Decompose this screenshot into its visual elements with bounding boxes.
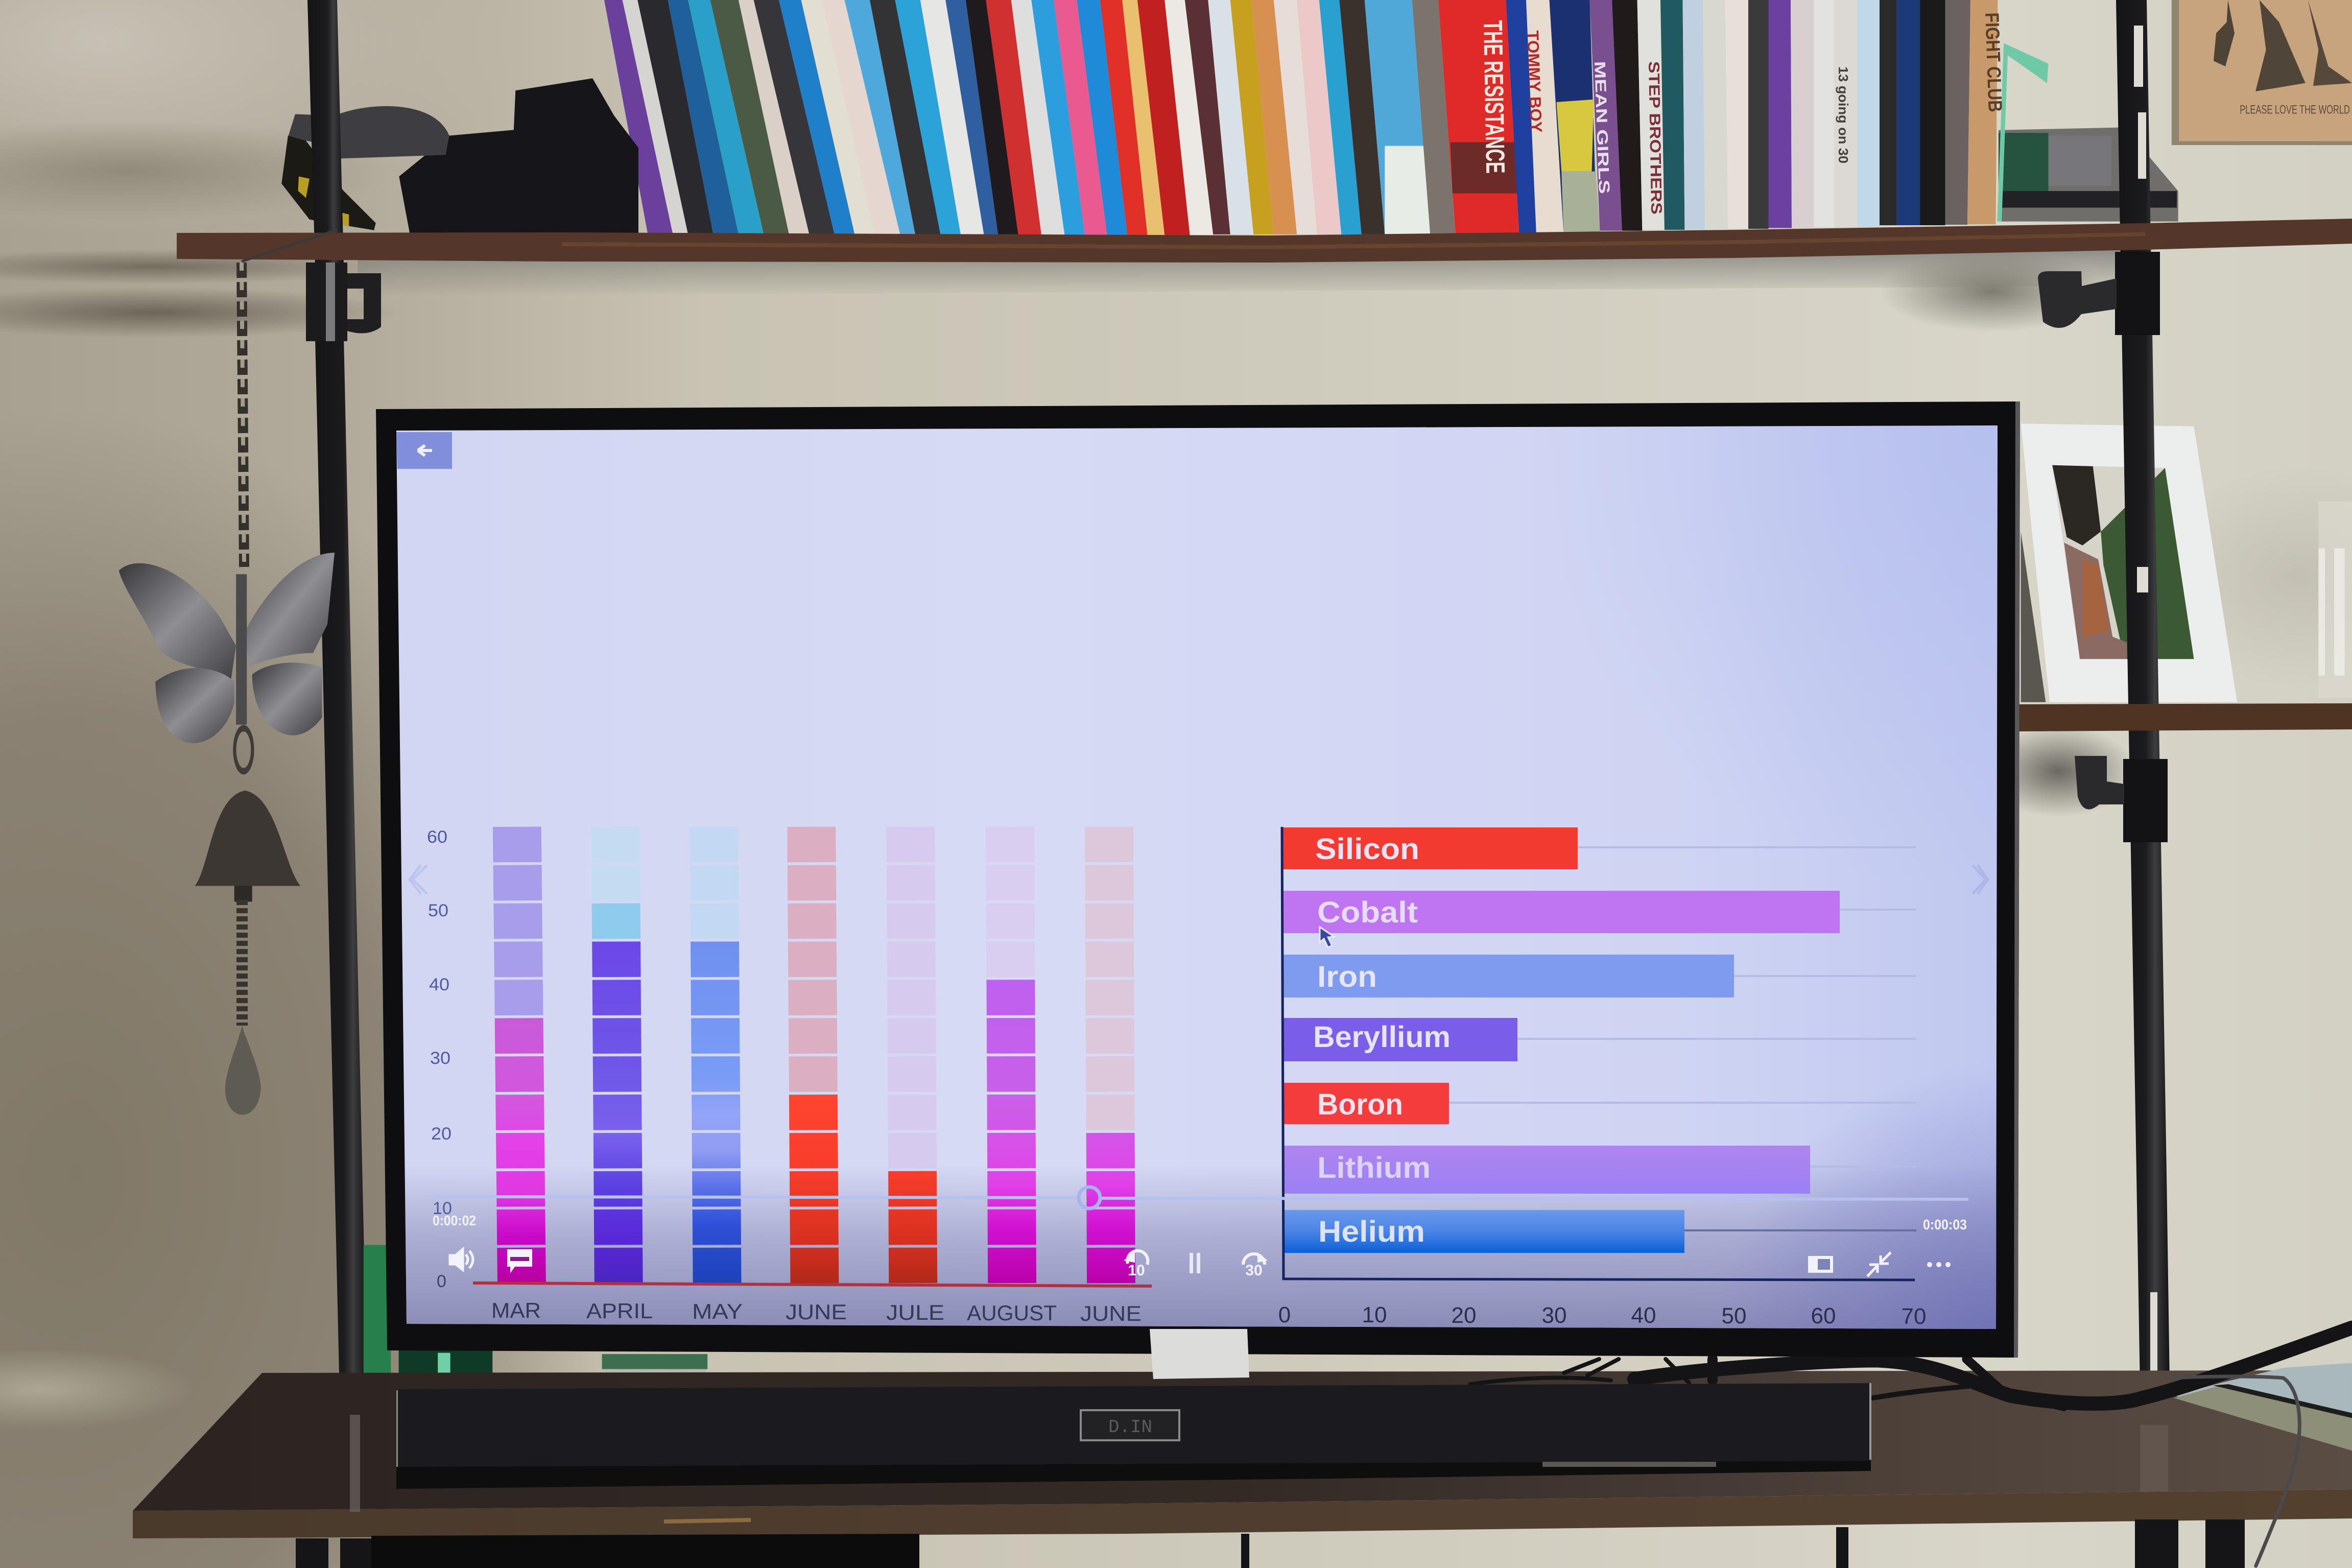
row of DVD spines on top shelf bbox=[604, 0, 1998, 235]
icon: captions bbox=[507, 1249, 532, 1273]
y axis labels: 50 bbox=[428, 901, 448, 920]
soundbar display bbox=[1081, 1410, 1179, 1440]
month labels: JULE bbox=[886, 1300, 944, 1324]
column: JUNE bbox=[812, 827, 815, 1285]
bar: Cobalt bbox=[1282, 891, 1840, 933]
x axis labels: 70 bbox=[1902, 1304, 1926, 1329]
left pipe lower section bbox=[315, 337, 368, 1418]
seek handle bbox=[1079, 1187, 1100, 1208]
next chevron bbox=[1973, 865, 1988, 894]
right pipe paint chips bbox=[2134, 26, 2157, 1415]
shelf on the right below picture frame bbox=[2019, 703, 2352, 731]
bar: Helium bbox=[1284, 1210, 1684, 1253]
column: MAY bbox=[714, 827, 717, 1284]
month labels: AUGUST bbox=[967, 1301, 1057, 1325]
legible spine titles on DVDs: FIGHT CLUB bbox=[1981, 12, 2006, 112]
y axis labels: 10 bbox=[433, 1199, 452, 1218]
bar: Boron: Boron bbox=[1317, 1088, 1403, 1121]
table legs bbox=[296, 1519, 2245, 1568]
back button bbox=[396, 432, 452, 469]
soundbar bbox=[396, 1383, 1871, 1489]
icon: picture in picture bbox=[1808, 1256, 1833, 1273]
previous chevron bbox=[410, 865, 427, 894]
month labels: MAR bbox=[491, 1298, 541, 1322]
x axis labels: 20 bbox=[1452, 1303, 1476, 1328]
bottle on the table bbox=[602, 1354, 707, 1388]
bar: Cobalt: Cobalt bbox=[1317, 896, 1418, 929]
legible spine titles on DVDs bbox=[1478, 12, 2006, 215]
jar on right shelf bbox=[2318, 501, 2352, 698]
month labels bbox=[491, 1298, 1142, 1325]
bar: Lithium: Lithium bbox=[1317, 1151, 1431, 1184]
right pipe fitting with bracket bbox=[2038, 252, 2160, 335]
icon: forward 30 bbox=[1243, 1252, 1268, 1279]
y axis labels: 20 bbox=[431, 1124, 452, 1144]
lower right pipe fitting with bracket bbox=[2075, 756, 2168, 842]
x axis labels: 50 bbox=[1722, 1303, 1746, 1328]
spring and clapper bbox=[225, 900, 261, 1115]
icon: rewind 10: 10 bbox=[1128, 1262, 1145, 1279]
guide lines bbox=[1449, 847, 1916, 1230]
legible spine titles on DVDs: MEAN GIRLS bbox=[1591, 61, 1612, 194]
cursor arrow bbox=[1320, 927, 1334, 947]
cables behind soundbar bbox=[1470, 1328, 2352, 1566]
axes bbox=[1282, 827, 1915, 1280]
column: JUNE second bbox=[1109, 827, 1111, 1286]
month labels: MAY bbox=[692, 1299, 743, 1323]
tv bezel bbox=[376, 401, 2020, 1358]
table front edge bbox=[133, 1489, 2352, 1538]
icon: forward 30: 30 bbox=[1245, 1262, 1263, 1279]
top wooden shelf bbox=[177, 219, 2352, 263]
green objects behind tv on the left bbox=[364, 1245, 492, 1388]
column: JULE bbox=[911, 827, 913, 1285]
legible spine titles on DVDs: 13 going on 30 bbox=[1836, 66, 1851, 163]
bar: Helium: Helium bbox=[1318, 1215, 1425, 1248]
screen background bbox=[393, 421, 2002, 1336]
legible spine titles on DVDs: STEP BROTHERS bbox=[1645, 61, 1665, 215]
poster on wall, top right bbox=[2172, 0, 2352, 145]
chime chain bbox=[242, 230, 337, 567]
bar: Silicon bbox=[1282, 827, 1578, 869]
x axis labels: 0 bbox=[1278, 1302, 1291, 1327]
column: MAR bbox=[517, 827, 521, 1283]
x axis labels bbox=[1278, 1302, 1926, 1329]
bar: Beryllium: Beryllium bbox=[1313, 1020, 1451, 1054]
bar: Iron bbox=[1283, 955, 1734, 997]
icon: rewind 10 bbox=[1124, 1251, 1148, 1279]
icon: more options bbox=[1927, 1262, 1951, 1267]
video player controls bbox=[433, 1187, 1968, 1279]
month labels: JUNE bbox=[786, 1300, 847, 1324]
left chart: stacked segment columns bbox=[427, 827, 1152, 1325]
baseline bbox=[473, 1283, 1152, 1286]
x axis labels: 40 bbox=[1631, 1303, 1656, 1328]
icon: pause bbox=[1190, 1253, 1200, 1273]
butterfly wings bbox=[119, 553, 335, 743]
y axis labels: 40 bbox=[429, 975, 449, 994]
right metal pipe bbox=[2116, 0, 2170, 1418]
bar: Silicon: Silicon bbox=[1315, 833, 1419, 866]
soundbar display: D.IN bbox=[1108, 1417, 1152, 1438]
bar: Lithium bbox=[1284, 1146, 1810, 1194]
poster on wall, top right: PLEASE LOVE THE WORLD bbox=[2240, 103, 2350, 116]
y axis labels bbox=[427, 827, 452, 1291]
x axis labels: 10 bbox=[1362, 1302, 1387, 1327]
butterfly wind chime bbox=[119, 230, 337, 1115]
column: APRIL bbox=[615, 827, 619, 1283]
bar: Beryllium bbox=[1283, 1018, 1517, 1061]
x axis labels: 30 bbox=[1542, 1303, 1566, 1328]
month labels: JUNE bbox=[1080, 1301, 1142, 1325]
column: AUGUST bbox=[1010, 827, 1012, 1286]
picture frame with photo bbox=[2021, 423, 2237, 702]
month labels: APRIL bbox=[586, 1299, 653, 1323]
column group bbox=[517, 827, 1111, 1286]
tv screen bbox=[393, 421, 2002, 1336]
bell bbox=[195, 728, 300, 901]
camera with strap on top shelf bbox=[281, 78, 638, 234]
legible spine titles on DVDs: THE RESISTANCE bbox=[1478, 20, 1510, 174]
left pipe fitting with bracket bbox=[306, 263, 381, 341]
dark cabinet under the table bbox=[371, 1534, 919, 1568]
bar: Boron bbox=[1283, 1083, 1449, 1124]
seek line bbox=[433, 1197, 1968, 1199]
y axis labels: 30 bbox=[430, 1049, 450, 1068]
table reflections bbox=[350, 1415, 2168, 1512]
left metal pipe bbox=[307, 0, 344, 266]
table surface bbox=[133, 1370, 2352, 1511]
x axis labels: 60 bbox=[1811, 1303, 1836, 1328]
disc spindle and green divider on top shelf bbox=[1997, 43, 2178, 222]
bar: Iron: Iron bbox=[1317, 960, 1377, 993]
notebook on the table bbox=[2174, 1363, 2352, 1451]
right chart: horizontal bars bbox=[1278, 827, 1926, 1329]
remaining time: 0:00:03 bbox=[1923, 1217, 1967, 1232]
white clip on tv bottom bbox=[1150, 1329, 1249, 1379]
y axis labels: 0 bbox=[437, 1272, 446, 1291]
icon: exit fullscreen bbox=[1867, 1252, 1891, 1276]
legible spine titles on DVDs: TOMMY BOY bbox=[1524, 30, 1546, 133]
elapsed time: 0:00:02 bbox=[433, 1213, 476, 1228]
icon: volume bbox=[450, 1249, 473, 1270]
y axis labels: 60 bbox=[427, 827, 447, 847]
